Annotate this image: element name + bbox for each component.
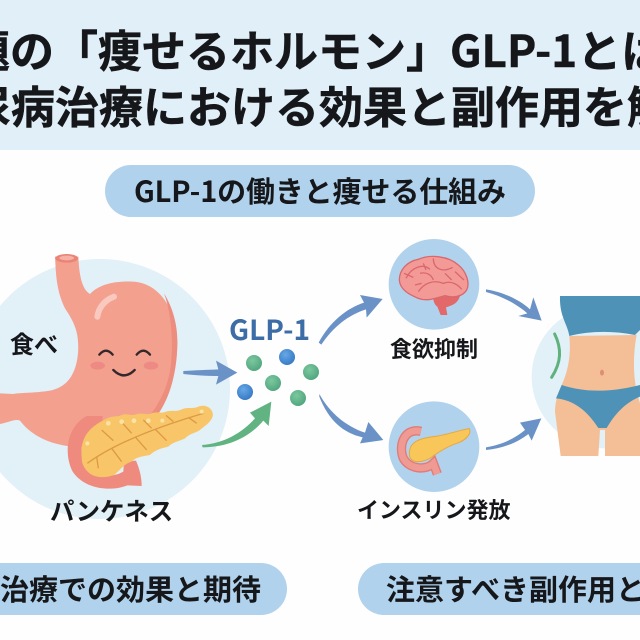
header band [0,0,640,150]
GLP-1 molecules [237,349,319,406]
arrow: insulin to body [486,418,541,450]
icon: pancreas [401,429,470,474]
node: insulin release [389,401,479,492]
duodenum [68,416,142,489]
background circle [532,305,640,448]
node: appetite suppression [389,239,479,330]
GLP-1 label: GLP-1 [229,309,310,349]
arrow: GLP-1 to insulin [319,394,383,443]
arrow: GLP-1 to appetite [319,295,383,345]
label: insulin release: インスリン発放 [357,493,511,525]
icon: torso [552,296,640,456]
icon: stomach with face [0,254,213,489]
panel: digestive organs [0,254,230,519]
section heading pill: mechanism: GLP-1の働きと痩せる仕組み [134,169,506,211]
face [99,351,150,375]
pancreas [81,406,213,477]
section heading pill: mechanism [105,165,535,217]
panel: slim body result [532,296,640,456]
label: pancreas: パンケネス [50,493,173,528]
title [0,16,640,136]
arrow: appetite to body [486,289,542,321]
label: appetite suppression: 食欲抑制 [390,332,478,364]
label: food: 食べ [10,325,58,360]
arrow: pancreas to GLP-1 [202,402,271,447]
icon: brain [399,256,468,315]
arrow: stomach to GLP-1 [183,361,237,385]
background circle [0,259,230,519]
